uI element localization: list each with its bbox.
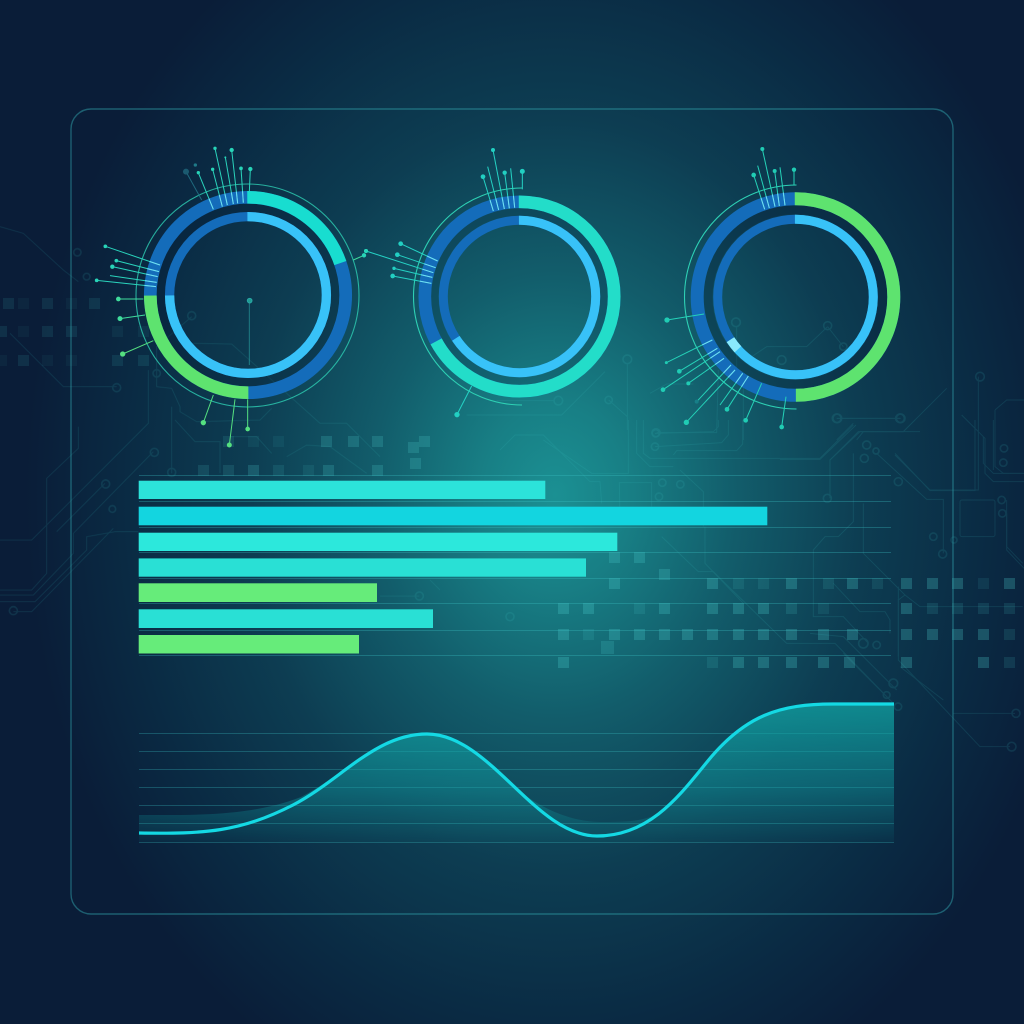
outer ring segments	[425, 202, 614, 391]
spokes with end dots	[95, 147, 366, 447]
inner ring segments	[170, 217, 326, 373]
area line chart	[139, 704, 894, 842]
inner ring segments	[718, 219, 873, 375]
outer ring segments	[150, 197, 346, 393]
bar 2	[139, 507, 767, 525]
gap ring shadow	[434, 212, 604, 382]
traces: under third donut	[650, 318, 920, 440]
pixel squares: band above bars	[198, 436, 430, 476]
bar 1	[139, 481, 545, 499]
bar 7	[139, 635, 359, 654]
bar chart	[139, 476, 891, 656]
bar 4	[139, 558, 586, 577]
connector between donut 1 and donut 2	[364, 249, 368, 253]
thin outline arc	[414, 188, 522, 405]
outer frame panel	[71, 109, 953, 914]
bar 6	[139, 609, 433, 628]
donut chart 1	[95, 147, 366, 447]
centre node	[247, 298, 252, 365]
pixel squares: left band	[0, 298, 149, 366]
donut chart 3	[661, 147, 894, 429]
bar 3	[139, 533, 617, 551]
trend line	[139, 704, 894, 836]
traces: centre and right	[500, 420, 1023, 703]
circuit traces background	[0, 227, 1024, 751]
thin outline arc	[685, 185, 796, 409]
spokes with end dots	[661, 147, 796, 429]
traces: left side	[0, 227, 440, 615]
traces: lower right edge	[780, 372, 1024, 751]
gap ring shadow	[708, 210, 883, 384]
gap ring shadow	[161, 208, 335, 382]
area fill	[139, 704, 894, 842]
thin outline ring	[136, 184, 359, 407]
bar 5	[139, 583, 377, 602]
pixel squares: right band	[558, 552, 1015, 668]
donut chart 2	[364, 148, 614, 417]
traces: under second donut	[467, 355, 632, 430]
inner ring segments	[443, 220, 596, 373]
outer ring segments	[697, 199, 894, 395]
spokes with end dots	[364, 148, 525, 417]
